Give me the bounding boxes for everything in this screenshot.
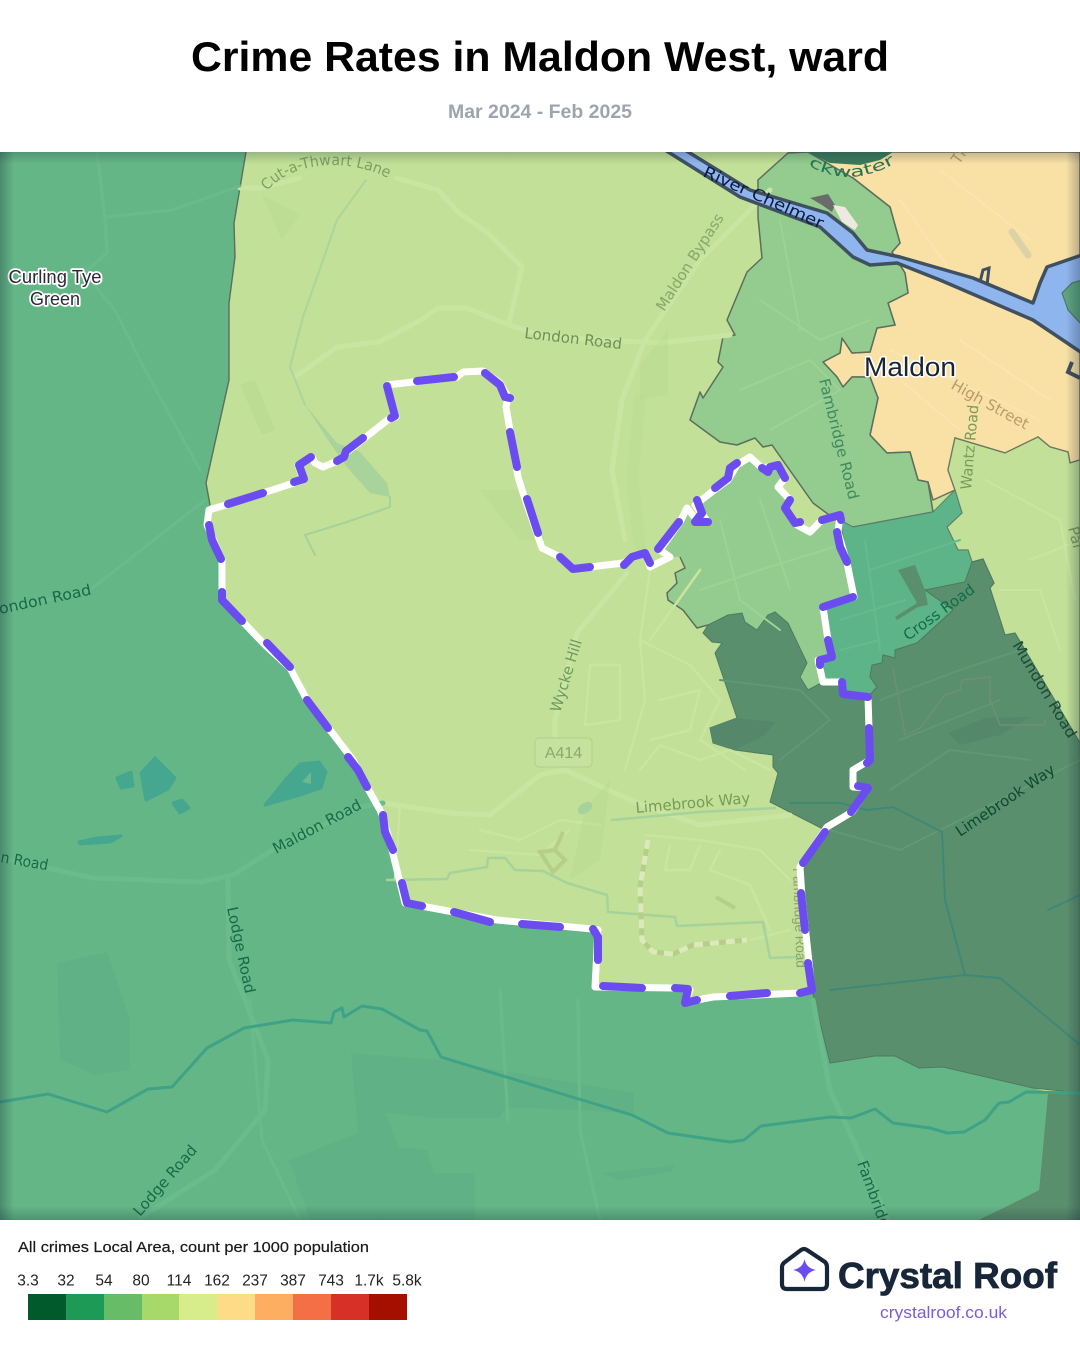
label: Curling Tye Green xyxy=(8,267,102,309)
label: A414 road shield: A414 xyxy=(545,745,582,762)
dark patch in western lobe xyxy=(710,718,738,750)
area: peach zone in Maldon town xyxy=(788,152,1080,500)
label: Cross Road: Cross Road xyxy=(900,580,978,644)
pond by A414 xyxy=(578,802,592,814)
pond island xyxy=(302,772,311,784)
label: Limebrook Way west: Limebrook Way xyxy=(635,789,751,817)
legend values: 80 xyxy=(132,1272,150,1290)
ward boundary: Maldon West xyxy=(207,371,870,1003)
label: Fambridge Road north: Fambridge Road xyxy=(815,377,863,501)
label: Th: Th xyxy=(947,142,973,168)
legend values: 1.7k xyxy=(354,1272,384,1290)
label: A414 road shield xyxy=(535,738,592,767)
legend xyxy=(17,1239,422,1320)
boundary white base xyxy=(207,371,870,1003)
area: dark south-eastern zone xyxy=(703,559,1080,1093)
legend values xyxy=(17,1272,422,1290)
green zone woodland patches xyxy=(57,952,675,1220)
legend values: 54 xyxy=(95,1272,113,1290)
label: River Chelmer: River Chelmer xyxy=(700,162,827,233)
area: western and southern medium green zone xyxy=(0,152,1048,1220)
dark patch in eastern area xyxy=(948,717,1030,745)
logo: Crystal Roof xyxy=(782,1249,1058,1322)
label: Maldon Bypass: Maldon Bypass xyxy=(652,210,728,314)
wetland pond in ward xyxy=(305,405,390,497)
label: Mundon Road: Mundon Road xyxy=(1009,638,1080,741)
footpath railway dashes xyxy=(540,832,747,954)
major roads xyxy=(238,169,1080,1110)
legend values: 3.3 xyxy=(17,1272,39,1290)
label: Fambridge Road south under boundary: Fambridge Road xyxy=(790,868,809,968)
legend values: 743 xyxy=(318,1272,344,1290)
icon: house with star xyxy=(782,1249,827,1289)
parkland patches xyxy=(240,195,668,880)
label: Maldon Road: Maldon Road xyxy=(269,796,364,858)
ponds xyxy=(79,758,326,844)
legend colour scale xyxy=(28,1294,407,1320)
boundary purple dashes xyxy=(209,373,870,1003)
legend values: 114 xyxy=(167,1272,192,1290)
map edge vignette xyxy=(0,152,1080,1220)
label: Maldon town: Maldon xyxy=(864,352,956,382)
logo url: crystalroof.co.uk xyxy=(880,1304,1008,1322)
legend values: 162 xyxy=(204,1272,230,1290)
area: far south-east dark corner xyxy=(978,1092,1080,1220)
river creek xyxy=(980,268,989,285)
river Chelmer xyxy=(665,150,1080,378)
legend title: All crimes Local Area, count per 1000 population xyxy=(18,1239,369,1256)
area: base light green zone xyxy=(206,152,1060,1220)
label: Curling Tye Green: Curling Tye xyxy=(8,267,102,287)
label: Lodge Road south: Lodge Road xyxy=(129,1141,201,1220)
label: Limebrook Way east: Limebrook Way xyxy=(952,760,1058,840)
area: inner ward mid green xyxy=(664,462,850,690)
river sandbank xyxy=(810,194,835,212)
area: teal zone xyxy=(823,490,972,697)
label: Fambridge south: Fambridge xyxy=(853,1158,897,1239)
label: Blackwater: ckwater xyxy=(810,156,892,177)
legend values: 387 xyxy=(280,1272,306,1290)
legend values: 32 xyxy=(57,1272,75,1290)
legend values: 5.8k xyxy=(392,1272,422,1290)
label: Cut-a-Thwart Lane: Cut-a-Thwart Lane xyxy=(262,156,390,188)
title: Crime Rates in Maldon West, ward xyxy=(191,33,889,80)
label: High Street: High Street xyxy=(948,376,1032,433)
legend values: 237 xyxy=(242,1272,268,1290)
gray patch in town xyxy=(1012,232,1028,255)
river island xyxy=(1062,280,1080,325)
dark water at top xyxy=(807,152,893,165)
area: eastern light green zone xyxy=(947,437,1080,743)
subtitle: date range: Mar 2024 - Feb 2025 xyxy=(448,102,632,123)
area: northern mid green ward xyxy=(690,152,933,527)
label: Road west: n Road xyxy=(0,848,50,874)
estate streets xyxy=(395,570,790,940)
logo wordmark: Crystal Roof xyxy=(838,1255,1058,1296)
label: Curling Tye Green: Green xyxy=(30,289,80,309)
dark block within teal zone xyxy=(895,565,928,620)
label: London Road north: London Road xyxy=(524,324,623,353)
river jetty xyxy=(1068,362,1080,378)
label: Wycke Hill: Wycke Hill xyxy=(547,637,586,714)
label: Wantz Road: Wantz Road xyxy=(957,404,982,490)
label: Lodge Road middle: Lodge Road xyxy=(223,905,259,995)
eastern zone streets xyxy=(985,480,1080,650)
streams xyxy=(0,180,1080,1142)
